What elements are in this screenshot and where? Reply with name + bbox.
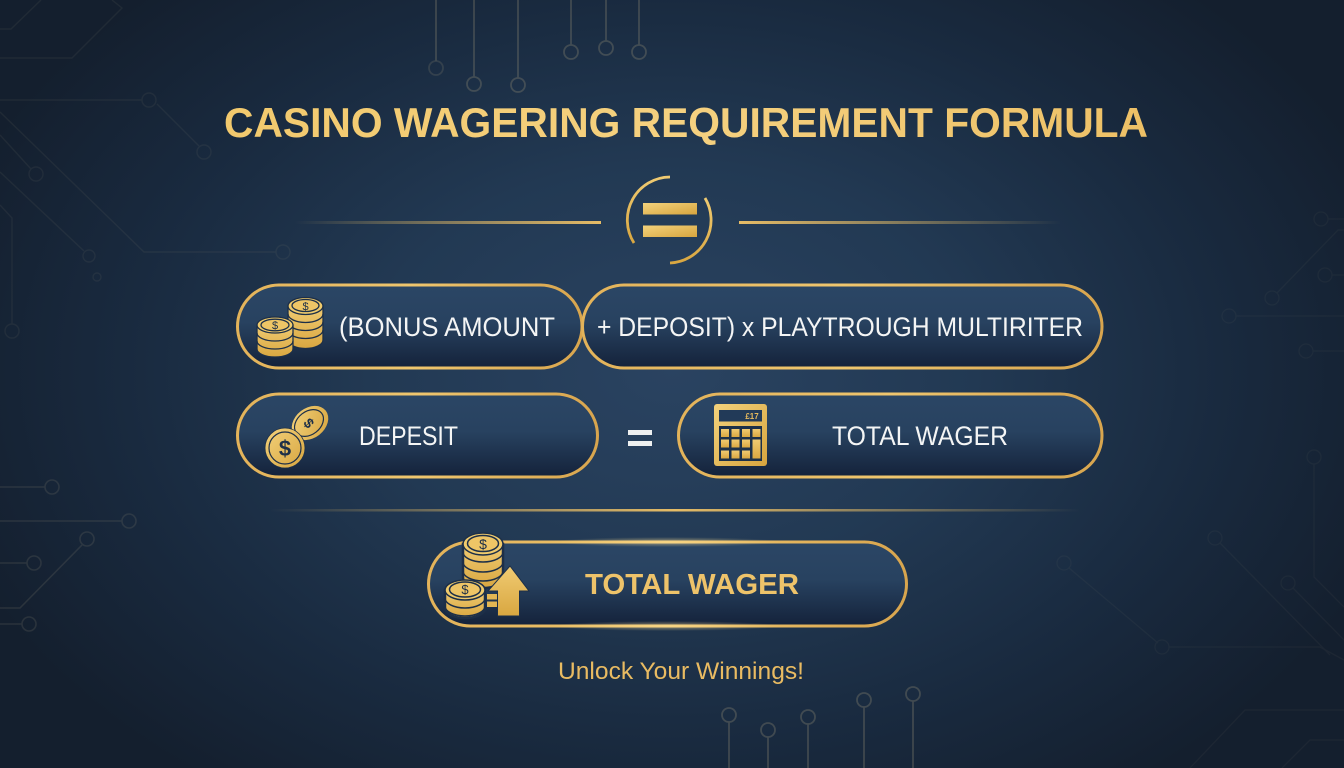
panel: deposit and playthrough multiplier	[582, 285, 1102, 368]
circuit pattern: right	[1057, 212, 1344, 768]
divider: lower	[270, 509, 1080, 512]
circuit pattern: bottom	[722, 687, 920, 768]
icon: coin stacks: $	[302, 301, 309, 313]
icon: calculator: £17	[745, 412, 759, 421]
icon: coin stacks: $	[272, 320, 278, 332]
glow: pill top	[552, 537, 782, 547]
title: CASINO WAGERING REQUIREMENT FORMULA	[224, 99, 1148, 146]
icon: two coins	[265, 399, 335, 468]
tagline: Unlock Your Winnings!	[558, 658, 804, 685]
equals sign: white	[628, 430, 652, 446]
icon: coin stacks with up arrow: $	[479, 536, 487, 552]
glow: pill bottom	[552, 621, 782, 631]
icon: calculator	[714, 404, 767, 466]
icon: equals sign in broken circle	[627, 177, 711, 263]
label: total wager: TOTAL WAGER	[832, 421, 1008, 451]
icon: coin stacks with up arrow: $	[461, 582, 469, 597]
divider: left of equals	[295, 221, 601, 224]
circuit pattern: top	[429, 0, 646, 92]
divider: right of equals	[739, 221, 1061, 224]
icon: two coins: $	[300, 415, 318, 431]
label: bonus amount: (BONUS AMOUNT	[339, 312, 555, 342]
panel: result total wager	[428, 533, 906, 631]
panel: total wager	[678, 394, 1102, 477]
circuit pattern: top left	[0, 0, 290, 338]
icon: coin stacks with up arrow	[445, 533, 529, 618]
label: deposit and multiplier: + DEPOSIT) x PLAYTROUGH MULTIRITER	[597, 312, 1083, 342]
panel: bonus amount	[238, 285, 582, 368]
icon: coin stacks	[257, 298, 323, 357]
label: deposit: DEPESIT	[359, 421, 458, 451]
label: result total wager: TOTAL WAGER	[585, 569, 799, 601]
circuit pattern: lower left	[0, 480, 136, 631]
icon: two coins: $	[279, 436, 291, 461]
panel: deposit	[238, 394, 598, 477]
